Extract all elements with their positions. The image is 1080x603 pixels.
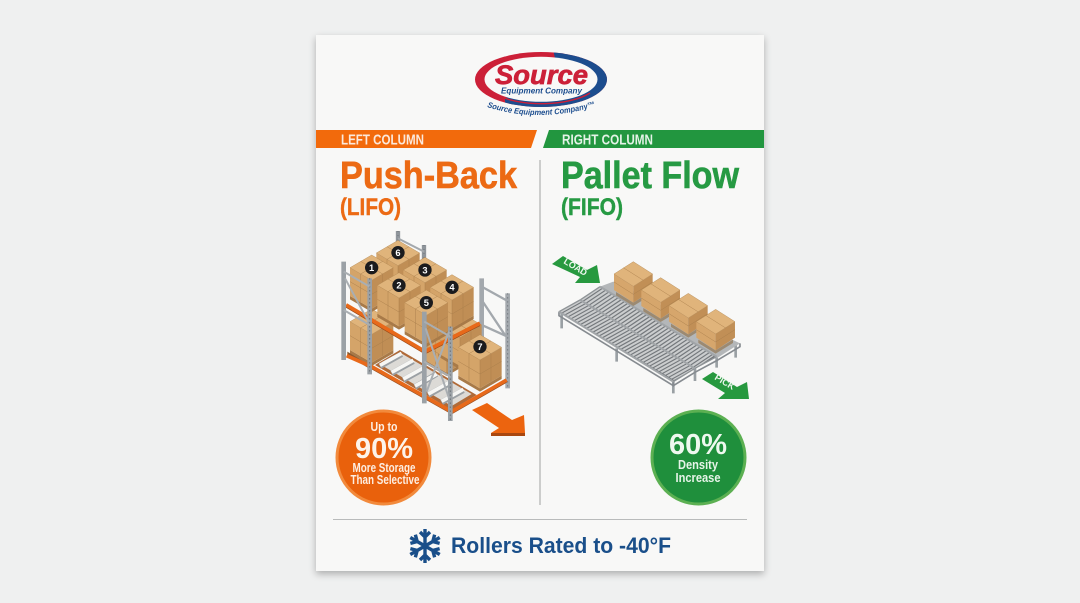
badge: 90% more storage: More Storage <box>352 461 416 475</box>
right column banner: RIGHT COLUMN <box>562 132 653 148</box>
subheading: FIFO: (FIFO) <box>561 194 623 221</box>
pallet stack 5: 5 <box>424 298 429 308</box>
badge: 90% more storage: 90% <box>355 433 413 465</box>
arrow: pick <box>702 372 749 399</box>
left column banner <box>316 130 537 148</box>
pallet stack 1: 1 <box>369 263 374 273</box>
logo: Source <box>495 60 588 90</box>
arrow: load <box>552 256 600 283</box>
pallet stack 1 <box>350 255 393 312</box>
logo <box>475 52 607 117</box>
pallet stack 4 <box>430 275 474 332</box>
badge: 90% more storage: Than Selective <box>350 473 420 487</box>
logo: Equipment Company <box>501 86 583 96</box>
illustration: push-back rack <box>344 231 508 421</box>
badge: 90% more storage <box>337 411 430 504</box>
pallet box 3 <box>669 293 708 338</box>
pallet stack 5 <box>405 290 448 347</box>
badge: 60% density: Density <box>678 457 719 472</box>
arrow: push-back direction <box>472 403 525 436</box>
arrow: load: LOAD <box>562 256 589 278</box>
right column banner <box>543 130 764 148</box>
poster card <box>316 35 764 571</box>
pallet stack 3: 3 <box>422 265 428 275</box>
subheading: LIFO: (LIFO) <box>340 194 401 221</box>
left column banner: LEFT COLUMN <box>341 132 424 148</box>
heading: Pallet Flow: Pallet Flow <box>561 155 739 197</box>
heading: Push-Back: Push-Back <box>340 155 518 197</box>
badge: 60% density: 60% <box>669 429 727 461</box>
footer text: Rollers Rated to -40°F <box>451 533 671 558</box>
pallet stack 6: 6 <box>395 248 401 258</box>
badge: 60% density <box>652 411 745 504</box>
icon: snowflake <box>408 529 442 563</box>
pallet stack 3 <box>403 257 447 314</box>
pallet stack 7 <box>458 335 502 392</box>
badge: 60% density: Increase <box>676 470 720 485</box>
badge: 90% more storage: Up to <box>370 419 398 434</box>
illustration: pallet flow conveyor <box>559 262 740 393</box>
logo: Source Equipment Company™ <box>488 101 594 117</box>
pallet box 4 <box>696 309 735 354</box>
pallet stack 2 <box>377 273 421 330</box>
pallet stack 2: 2 <box>396 281 402 291</box>
pallet box 2 <box>641 278 680 322</box>
roller deck <box>375 350 477 410</box>
pallet stack 4: 4 <box>449 283 455 293</box>
pallet stack 7: 7 <box>477 342 483 352</box>
pallet stack 6 <box>376 240 420 297</box>
arrow: pick: PICK <box>713 372 737 392</box>
pallet box 1 <box>614 262 653 306</box>
